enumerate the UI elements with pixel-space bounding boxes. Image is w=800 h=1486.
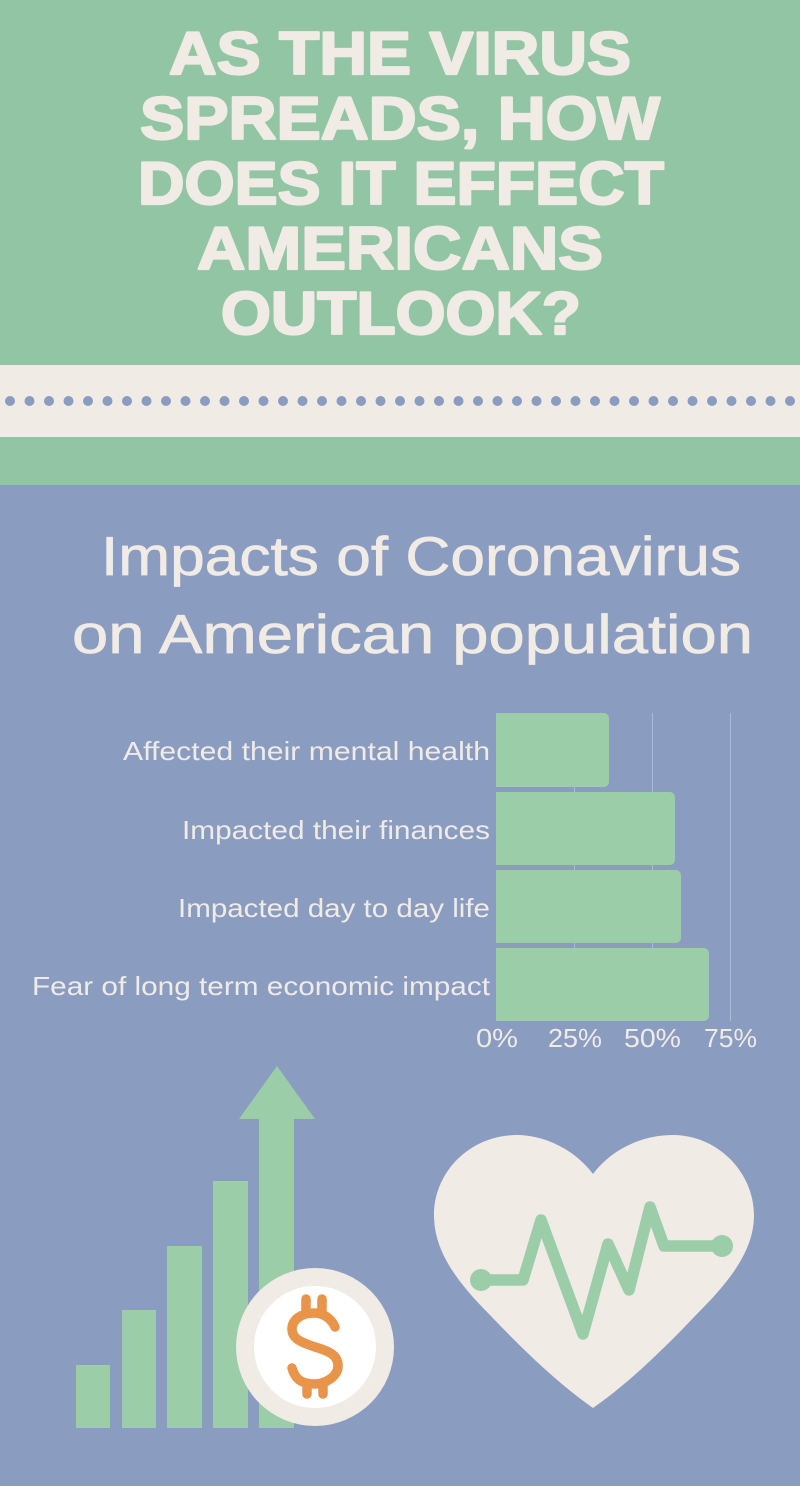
axis labels: 25% [548, 1025, 602, 1053]
category labels: Affected their mental health [123, 736, 490, 766]
bar: long term economic impact [496, 948, 709, 1021]
category labels [32, 736, 491, 1001]
section heading [72, 525, 753, 665]
category labels: Fear of long term economic impact [32, 971, 491, 1001]
title: SPREADS, HOW [140, 85, 660, 152]
bar: finances [496, 792, 675, 865]
icon: heart with pulse line [434, 1135, 754, 1408]
dotted divider band [0, 365, 800, 437]
axis labels: 50% [624, 1025, 681, 1053]
axis labels: 0% [476, 1025, 518, 1053]
bar chart [32, 713, 757, 1053]
section heading: Impacts of Coronavirus [101, 525, 741, 587]
axis labels: 75% [704, 1025, 757, 1053]
bar: day to day life [496, 870, 681, 943]
category labels: Impacted their finances [182, 815, 490, 845]
icon: rising bars with arrow and dollar coin [76, 1066, 394, 1428]
section heading: on American population [72, 603, 753, 665]
axis labels [476, 1025, 757, 1053]
title: OUTLOOK? [221, 280, 581, 347]
header panel [0, 0, 800, 485]
category labels: Impacted day to day life [178, 893, 490, 923]
title: AMERICANS [197, 215, 603, 282]
title: AS THE VIRUS [169, 20, 631, 87]
bar: mental health [496, 713, 609, 787]
title [138, 20, 664, 347]
title: DOES IT EFFECT [138, 150, 664, 217]
